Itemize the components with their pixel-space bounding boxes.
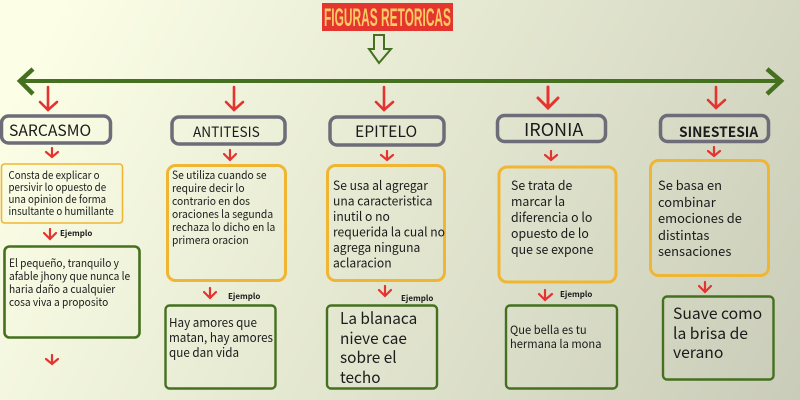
column: sarcasmo bbox=[2, 87, 140, 364]
arrow to sinestesia bbox=[708, 87, 725, 108]
title bbox=[322, 3, 453, 32]
definition: epitelo bbox=[328, 166, 445, 280]
arrow to definition bbox=[381, 151, 393, 160]
column: antitesis bbox=[166, 87, 286, 388]
example: sinestesia: verano bbox=[673, 340, 723, 363]
example: epitelo bbox=[327, 306, 437, 388]
example: epitelo: sobre el bbox=[340, 345, 397, 368]
arrow to definition bbox=[224, 150, 236, 160]
extra arrow below bbox=[46, 355, 58, 364]
example: antitesis: matan, hay amores bbox=[169, 329, 273, 346]
definition: sarcasmo: una opinion de forma bbox=[8, 191, 106, 206]
double-headed main arrow bbox=[20, 69, 781, 94]
heading: sarcasmo: SARCASMO bbox=[9, 118, 91, 141]
example: epitelo: techo bbox=[340, 365, 381, 388]
definition: antitesis: primera oracion bbox=[172, 233, 249, 248]
heading: antitesis bbox=[172, 117, 285, 144]
definition: ironia: Se trata de bbox=[511, 175, 572, 194]
heading: sarcasmo bbox=[2, 116, 110, 143]
example: ironia: hermana la mona bbox=[510, 336, 601, 352]
label: ejemplo: Ejemplo bbox=[60, 228, 92, 239]
definition: sinestesia: combinar bbox=[658, 192, 717, 211]
arrow to example bbox=[204, 288, 216, 298]
definition: ironia: opuesto de lo bbox=[511, 223, 589, 242]
arrow to epitelo bbox=[376, 87, 393, 110]
label: ejemplo: Ejemplo bbox=[560, 289, 592, 300]
definition: antitesis: require decir lo bbox=[172, 181, 245, 196]
definition: antitesis: contrario en dos bbox=[172, 194, 250, 209]
example: sinestesia: Suave como bbox=[673, 301, 762, 324]
definition: antitesis: oraciones la segunda bbox=[172, 207, 273, 222]
arrow to example bbox=[699, 282, 711, 292]
column: ironia bbox=[498, 87, 617, 388]
definition: sinestesia: sensaciones bbox=[658, 241, 731, 260]
example: sarcasmo: haria daño a cualquier bbox=[9, 281, 116, 297]
label: ejemplo: Ejemplo bbox=[401, 293, 433, 304]
column: sinestesia bbox=[650, 87, 774, 380]
arrow to example bbox=[44, 229, 56, 239]
example: sinestesia bbox=[663, 296, 774, 380]
definition: ironia bbox=[499, 167, 616, 282]
example: sarcasmo bbox=[4, 246, 140, 338]
definition: ironia: marcar la bbox=[511, 191, 565, 210]
arrow to definition bbox=[46, 148, 58, 157]
example: sinestesia: la brisa de bbox=[673, 321, 748, 344]
example: sarcasmo: afable jhony que nunca le bbox=[9, 268, 130, 284]
definition: sarcasmo: persivir lo opuesto de bbox=[8, 179, 106, 194]
text: FIGURAS RETORICAS bbox=[324, 4, 451, 32]
definition: sarcasmo bbox=[2, 164, 122, 223]
heading: sinestesia bbox=[660, 116, 768, 142]
definition: sinestesia: distintas bbox=[658, 225, 709, 244]
arrow to sarcasmo bbox=[40, 87, 57, 110]
example: epitelo: nieve cae bbox=[340, 326, 407, 349]
definition: sinestesia: emociones de bbox=[658, 208, 742, 227]
example: ironia bbox=[506, 306, 617, 388]
heading: ironia bbox=[498, 116, 606, 142]
definition: sarcasmo: Consta de explicar o bbox=[8, 167, 99, 182]
example: ironia: Que bella es tu bbox=[510, 322, 587, 338]
definition: antitesis bbox=[168, 166, 286, 280]
definition: ironia: que se expone bbox=[511, 239, 593, 258]
definition: ironia: diferencia o lo bbox=[511, 207, 592, 226]
example: antitesis: que dan vida bbox=[169, 344, 239, 361]
definition: antitesis: rechaza lo dicho en la bbox=[172, 220, 275, 235]
arrow to definition bbox=[545, 151, 557, 160]
definition: epitelo: requerida la cual no bbox=[333, 222, 445, 241]
example: sarcasmo: El pequeño, tranquilo y bbox=[9, 255, 119, 271]
label: ejemplo: Ejemplo bbox=[228, 291, 260, 302]
definition: sinestesia bbox=[650, 160, 768, 276]
arrow to example bbox=[379, 286, 391, 296]
arrow to definition bbox=[708, 147, 720, 156]
definition: epitelo: Se usa al agregar bbox=[333, 176, 428, 194]
example: sarcasmo: cosa viva a proposito bbox=[9, 294, 108, 310]
heading: ironia: IRONIA bbox=[524, 116, 583, 142]
heading: antitesis: ANTITESIS bbox=[193, 122, 260, 142]
definition: epitelo: aclaracion bbox=[333, 253, 392, 272]
icon: hollow arrow from title to timeline bbox=[369, 35, 391, 63]
definition: epitelo: una caracteristica bbox=[333, 191, 432, 210]
example: epitelo: La blanaca bbox=[340, 306, 417, 329]
heading: epitelo bbox=[330, 117, 444, 145]
definition: sinestesia: Se basa en bbox=[658, 175, 722, 194]
example: antitesis: Hay amores que bbox=[169, 314, 257, 331]
definition: epitelo: agrega ninguna bbox=[333, 238, 420, 256]
example: antitesis bbox=[166, 306, 276, 388]
heading: sinestesia: SINESTESIA bbox=[679, 122, 758, 142]
definition: antitesis: Se utiliza cuando se bbox=[172, 168, 267, 183]
arrow to antitesis bbox=[226, 87, 243, 110]
arrow to ironia bbox=[538, 87, 558, 108]
definition: sarcasmo: insultante o humillante bbox=[8, 203, 114, 218]
heading: epitelo: EPITELO bbox=[355, 119, 417, 142]
definition: epitelo: inutil o no bbox=[333, 207, 390, 225]
column: epitelo bbox=[327, 87, 445, 388]
arrow to example bbox=[539, 290, 552, 300]
